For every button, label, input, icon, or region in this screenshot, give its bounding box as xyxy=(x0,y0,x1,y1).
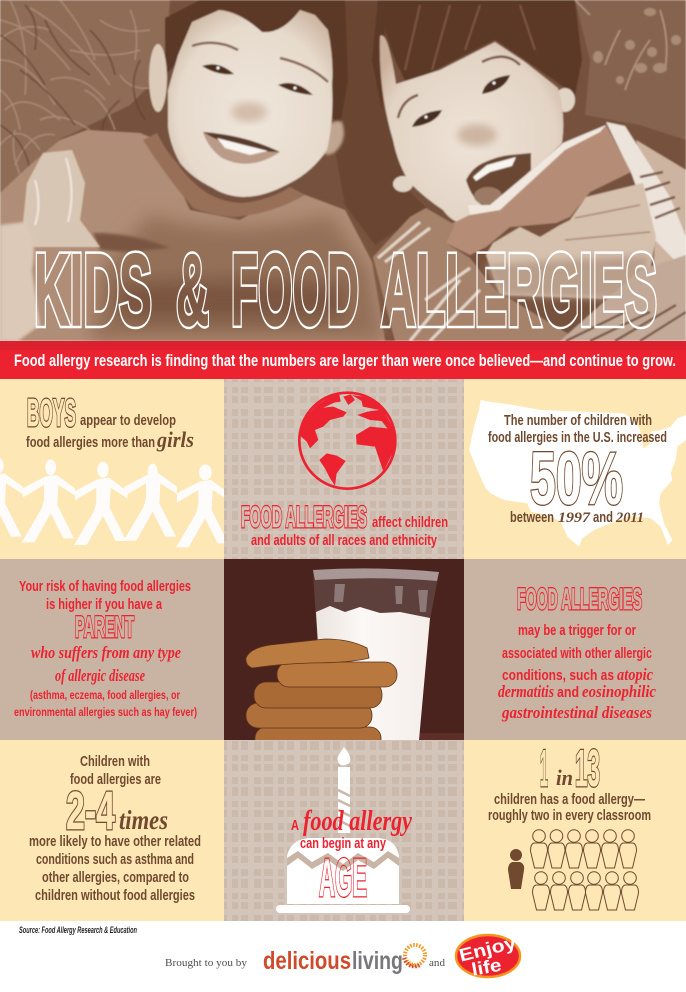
text: your risk: Your risk of having food allergies xyxy=(19,579,191,595)
striped towel xyxy=(606,122,686,272)
logo: delicious living xyxy=(263,945,425,975)
title xyxy=(36,250,657,330)
panel: parent risk xyxy=(0,559,224,740)
grass and dark background xyxy=(0,0,686,193)
source note: Source: Food Allergy Research & Education xyxy=(19,925,137,935)
panel: food allergies worldwide xyxy=(224,379,464,559)
text: children with: Children with xyxy=(80,754,150,770)
text: in: in xyxy=(556,765,573,790)
panel: boys xyxy=(0,379,229,559)
text: gastrointestinal diseases: gastrointestinal diseases xyxy=(501,703,652,722)
logo: delicious living: delicious xyxy=(263,947,351,975)
text: between 1997 and 2011: 1997 xyxy=(558,510,591,526)
right child's face xyxy=(380,35,575,223)
text: dermatitis and eosinophilic: dermatitis xyxy=(498,682,554,701)
text: is higher: is higher if you have a xyxy=(46,597,163,613)
title: & xyxy=(176,233,209,347)
text: food allergy: food allergy xyxy=(303,806,412,837)
title: FOOD xyxy=(231,233,359,347)
map: united states xyxy=(469,400,686,547)
panel: 1 in 13: 13 xyxy=(575,740,600,798)
icon: globe xyxy=(299,393,395,489)
panel: any age xyxy=(224,740,464,921)
logo: delicious living: living xyxy=(352,947,403,975)
icon: filled person xyxy=(508,849,524,889)
stat: 2-4: 2-4 xyxy=(66,781,115,841)
sponsor line: and xyxy=(429,957,445,969)
red banner xyxy=(0,341,686,379)
text: conditions such as: conditions such as asthma and xyxy=(36,852,194,868)
hero photo: two children eating bread xyxy=(0,0,686,341)
panel: 2-4 times xyxy=(0,740,224,921)
text: conditions: atopic xyxy=(617,665,653,684)
photo: cookies and milk xyxy=(224,559,464,751)
text: more likely: more likely to have other related xyxy=(29,834,201,850)
text: dermatitis and eosinophilic: and xyxy=(557,685,579,701)
icon: birthday cake xyxy=(276,747,410,913)
icon: classroom of outlined people xyxy=(530,830,638,910)
text: and adults: and adults of all races and ethnicity xyxy=(251,533,437,549)
text: between 1997 and 2011: between xyxy=(510,510,554,526)
sponsor line: Brought to you by xyxy=(165,957,247,969)
sponsor line xyxy=(165,932,520,980)
dark center shadow and hair xyxy=(165,0,445,245)
panel: 1 in 13 xyxy=(464,740,686,921)
title: KIDS xyxy=(34,233,152,347)
stack of cookies xyxy=(246,639,397,751)
stat: 50 percent: 50% xyxy=(530,437,623,520)
right child's striped shirt xyxy=(373,208,580,341)
icon: paper doll chain xyxy=(0,458,229,547)
text: conditions: conditions, such as xyxy=(502,668,614,684)
panel: boys: BOYS xyxy=(27,392,76,435)
text: times: times xyxy=(119,805,168,835)
text: of allergic disease: of allergic disease xyxy=(55,666,145,685)
left child's face xyxy=(149,10,344,197)
text: between 1997 and 2011: 2011 xyxy=(615,510,644,526)
text: between 1997 and 2011: and xyxy=(593,510,613,526)
text: can begin at any: can begin at any xyxy=(300,836,386,852)
left child's shirt xyxy=(0,130,385,341)
panel: trigger for other conditions xyxy=(464,559,686,740)
text: environmental allergies: environmental allergies such as hay fever) xyxy=(14,707,197,719)
text: dermatitis and eosinophilic xyxy=(498,682,656,701)
text: a: A xyxy=(291,817,299,834)
text: who suffers: who suffers from any type xyxy=(31,643,181,662)
text: between 1997 and 2011 xyxy=(510,510,644,526)
glass of milk xyxy=(313,568,439,740)
text: affect children: affect children xyxy=(372,515,448,531)
logo: enjoy life: Enjoy xyxy=(457,932,518,966)
panel: any age: AGE xyxy=(319,848,367,908)
panel: 50 percent increase xyxy=(464,379,686,559)
text: dermatitis and eosinophilic: eosinophilic xyxy=(582,682,656,701)
text: appear to develop: appear to develop xyxy=(80,413,176,429)
logo: enjoy life: life xyxy=(470,955,503,980)
panel: food allergies worldwide: FOOD ALLERGIES xyxy=(241,501,367,534)
text: food allergies more than: food allergies more than xyxy=(26,435,155,451)
right child's bread and hand xyxy=(446,125,656,300)
text: children without: children without food allergies xyxy=(35,888,195,904)
lower right strip of photo xyxy=(560,255,686,341)
text: other allergies: other allergies, compared to xyxy=(42,870,189,886)
right child's arm xyxy=(636,140,686,266)
text: girls: girls xyxy=(156,427,194,452)
logo: enjoy life xyxy=(456,932,520,980)
left child's bread xyxy=(23,150,100,247)
text: asthma eczema: (asthma, eczema, food allergies, or xyxy=(30,690,180,702)
text: may be a trigger: may be a trigger for or xyxy=(518,623,636,639)
panel: 1 in 13: 1 xyxy=(540,740,548,798)
right child's hair xyxy=(372,0,582,110)
text: food allergies are: food allergies are xyxy=(70,772,161,788)
panel: parent risk: PARENT xyxy=(75,611,134,644)
left child's hand xyxy=(0,222,40,341)
